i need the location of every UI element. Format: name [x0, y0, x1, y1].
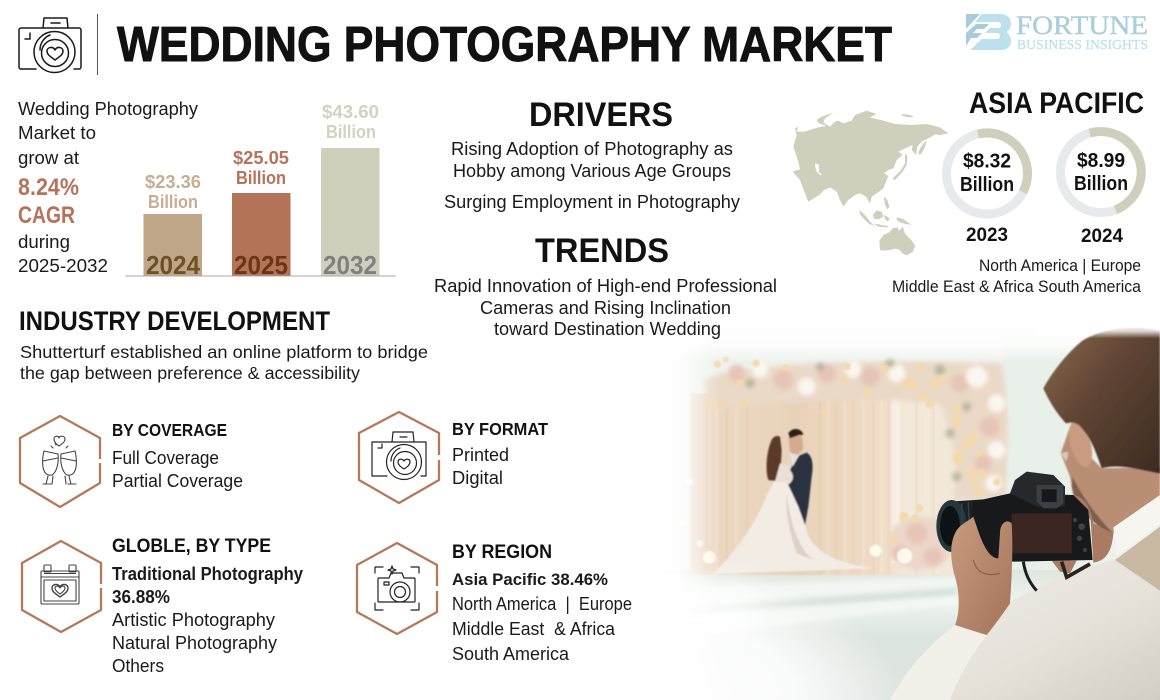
donut: 2023: $8.32: [963, 150, 1011, 172]
bar 2032: $43.60: [322, 101, 379, 122]
growth text block: during: [18, 231, 70, 252]
industry development: Shutterturf established an online platform to bridge: [20, 342, 428, 362]
background: curtain: [690, 393, 1007, 575]
industry development: INDUSTRY DEVELOPMENT: [19, 306, 330, 336]
bar 2025: 2025: [234, 252, 288, 280]
bar 2024: [144, 171, 202, 280]
segment: by type: GLOBLE, BY TYPE: [112, 535, 271, 557]
trends: [434, 232, 777, 339]
bar 2024: $23.36: [145, 171, 201, 192]
segment: by coverage: Partial Coverage: [112, 470, 243, 491]
donut: 2023: [946, 133, 1028, 246]
other regions text: North America | Europe: [979, 257, 1141, 275]
donut: 2024: [1060, 132, 1142, 247]
segment: by format: Printed: [452, 444, 509, 465]
background: side wall: [1003, 333, 1103, 580]
bar 2024: 2024: [146, 252, 201, 280]
bride hair: [767, 436, 782, 482]
donut: 2023: Billion: [960, 173, 1014, 196]
growth text block: 2025-2032: [18, 255, 108, 276]
icon: camera with heart: [19, 18, 81, 72]
industry development: the gap between preference & accessibility: [20, 363, 360, 383]
icon: focus camera in hexagon: [357, 543, 437, 634]
drivers: Hobby among Various Age Groups: [453, 160, 731, 181]
bar 2025: Billion: [236, 167, 286, 188]
donut: 2024: 2024: [1081, 225, 1123, 247]
bride upper body: [775, 463, 793, 483]
caspian sea: [815, 163, 822, 175]
logo: Fortune Business Insights: [966, 11, 1148, 52]
trends: Cameras and Rising Inclination: [480, 297, 731, 318]
background: floor: [720, 570, 1075, 700]
bar chart: market size: [125, 101, 396, 280]
divider: [97, 14, 98, 75]
bar 2032: Billion: [326, 121, 376, 142]
man: collar: [1113, 495, 1160, 534]
lens: [950, 499, 987, 552]
segment: by region: North America | Europe: [452, 593, 632, 614]
couple: bride and groom: [713, 429, 873, 574]
segment: by region: Asia Pacific 38.46%: [452, 570, 608, 589]
strap: [1023, 562, 1037, 591]
segment: by type: 36.88%: [112, 587, 170, 607]
industry development: [19, 306, 428, 383]
segment: by format: Digital: [452, 467, 503, 488]
growth text block: 8.24%: [18, 174, 79, 201]
man: left hand and arm: [951, 517, 1012, 635]
body: [970, 493, 1093, 562]
man: right hand: [1052, 495, 1113, 573]
icon: toasting glasses in hexagon: [20, 416, 100, 507]
asia pacific heading: ASIA PACIFIC: [969, 87, 1144, 120]
bar 2025: $25.05: [233, 147, 289, 168]
segment: by type: Natural Photography: [112, 632, 278, 653]
bar 2025: [232, 147, 290, 280]
bar 2032: 2032: [323, 252, 377, 280]
drivers: DRIVERS: [529, 96, 673, 134]
logo: Fortune Business Insights: BUSINESS INSIGHTS: [1017, 37, 1148, 52]
segment: by type: Traditional Photography: [112, 564, 303, 584]
segment: by region: [357, 541, 632, 664]
groom suit: [788, 453, 813, 525]
donut: 2024: $8.99: [1077, 149, 1125, 172]
segment: by coverage: [20, 416, 243, 507]
drivers: [444, 96, 741, 212]
growth text block: Market to: [18, 122, 96, 143]
fade: white vignette: [640, 320, 1160, 700]
segment: by type: Others: [112, 655, 164, 676]
segment: by coverage: BY COVERAGE: [112, 420, 227, 440]
man: hair: [1043, 328, 1160, 473]
other regions text: [892, 257, 1142, 296]
segment: by region: Middle East & Africa: [452, 618, 616, 639]
screen: [1012, 513, 1072, 553]
drivers: Rising Adoption of Photography as: [451, 138, 733, 159]
segment: by region: South America: [452, 643, 570, 664]
trends: toward Destination Wedding: [494, 318, 721, 339]
man: neck and face: [1061, 418, 1160, 533]
trends: TRENDS: [535, 232, 669, 270]
fade: top of background: [698, 324, 1094, 360]
other regions text: Middle East & Africa South America: [892, 278, 1142, 296]
drivers: Surging Employment in Photography: [444, 191, 741, 212]
man: back and shoulder: [890, 558, 1160, 700]
map: Asia Pacific: [793, 111, 948, 255]
bride dress: [713, 480, 873, 574]
segment: by type: Artistic Photography: [112, 609, 276, 630]
growth text block: [18, 98, 199, 276]
man: sleeve: [890, 625, 987, 700]
segment: by format: BY FORMAT: [452, 419, 548, 439]
background: flower garland: [703, 359, 1007, 570]
icon: camera in hexagon: [359, 412, 439, 503]
background: bokeh lights: [708, 356, 1000, 544]
segment: by coverage: Full Coverage: [112, 447, 219, 468]
trends: Rapid Innovation of High-end Professional: [434, 275, 777, 296]
donut: 2023: 2023: [966, 224, 1008, 246]
segment: by format: [359, 412, 548, 503]
groom face: [788, 435, 803, 457]
growth text block: Wedding Photography: [18, 98, 199, 119]
segment: by region: BY REGION: [452, 541, 552, 563]
camera body: [936, 472, 1093, 591]
growth text block: CAGR: [18, 202, 75, 229]
man: vest: [1115, 527, 1160, 591]
title: WEDDING PHOTOGRAPHY MARKET: [117, 18, 892, 72]
icon: calendar heart in hexagon: [22, 541, 101, 632]
bar 2032: [321, 101, 380, 280]
growth text block: grow at: [18, 147, 79, 168]
segment: by type: [22, 535, 303, 676]
photo: photographer shooting wedding couple: [688, 328, 1160, 700]
prism: [1010, 472, 1065, 507]
donut: 2024: Billion: [1074, 172, 1128, 195]
bar 2024: Billion: [148, 191, 198, 212]
logo: Fortune Business Insights: FORTUNE: [1016, 11, 1148, 40]
